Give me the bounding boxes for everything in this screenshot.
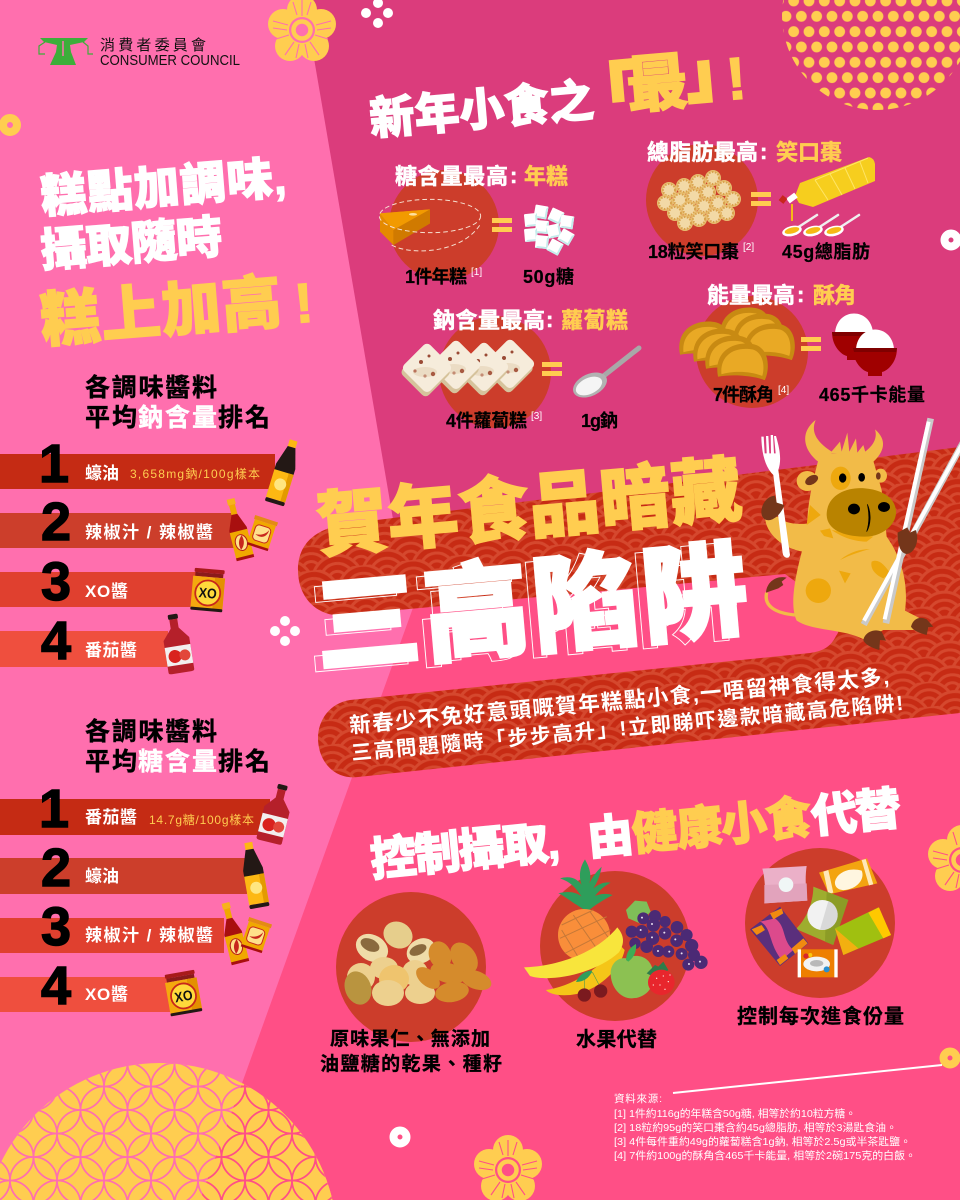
icon: equals sign <box>492 218 512 232</box>
panel: portion control: 控制每次進食份量 <box>737 1004 904 1028</box>
left title: 糕點加調味 攝取隨時 糕上加高: 攝取隨時 <box>39 211 224 277</box>
panel: highest sodium, turnip cake: 鈉含量最高 <box>433 308 545 333</box>
rank 4: XO sauce: 4 <box>41 956 71 1016</box>
rank 4: ketchup <box>0 611 195 675</box>
rank 4: ketchup: 4 <box>41 611 71 671</box>
muzzle <box>827 488 896 537</box>
sources footnote: [3] 4件每件重約49g的蘿蔔糕含1g鈉, 相等於2.5g或半茶匙鹽。 <box>614 1135 911 1148</box>
decoration: yellow lattice circle bottom left <box>0 1063 332 1200</box>
rank 3: XO sauce <box>0 552 226 612</box>
rank 2: oyster sauce: 蠔油 <box>85 866 119 886</box>
heading: 新年小食之「最」!: 最 <box>623 48 691 122</box>
panel: fruit: 水果代替 <box>576 1028 657 1051</box>
main title: 三高陷阱: 三高陷阱 <box>301 536 743 691</box>
horns and hair <box>805 420 883 463</box>
icon: cooking oil bottle with spoons <box>781 157 875 238</box>
icon: fruit <box>524 859 708 1002</box>
panel: highest energy, fried dumplings: 酥角 <box>813 283 856 308</box>
panel: highest sugar, nian gao <box>379 163 575 287</box>
heading: sugar ranking: 糖含量 <box>138 748 217 776</box>
logo: Consumer Council <box>39 37 240 69</box>
panel: highest energy, fried dumplings: 7件酥角 <box>713 385 774 405</box>
icon: equals sign <box>751 192 771 206</box>
icon: bowls of rice <box>832 314 897 376</box>
rank 1: oyster sauce: 3,658mg鈉/100g樣本 <box>130 466 260 481</box>
panel: fruit <box>524 859 708 1051</box>
bar chart: sodium ranking <box>0 434 303 675</box>
icon: nian gao slice with dashed outline <box>379 199 481 251</box>
panel: highest sodium, turnip cake: 蘿蔔糕 <box>561 308 628 333</box>
decoration: yellow dotted circle top right <box>782 0 960 110</box>
rank 2: chili sauce: 2 <box>41 492 71 552</box>
left title: 糕點加調味 攝取隨時 糕上加高: ! <box>292 271 316 335</box>
icon: equals sign <box>542 362 562 376</box>
main title: 三高陷阱: 三高陷阱 <box>310 532 752 687</box>
icon: smiling cookies <box>657 170 741 231</box>
heading: sodium ranking: 鈉含量 <box>138 404 217 432</box>
panel: highest sugar, nian gao: 糖含量最高 <box>395 164 508 189</box>
rank 2: oyster sauce: 2 <box>41 838 71 898</box>
heading: 新年小食之「最」!: 新年小食之 <box>367 75 596 145</box>
panel: portion control <box>737 848 904 1028</box>
rank 2: oyster sauce <box>0 838 270 909</box>
panel: highest sugar, nian gao: 50g糖 <box>523 267 574 287</box>
rank 1: oyster sauce <box>0 434 303 506</box>
panel: highest energy, fried dumplings: 465千卡能量 <box>819 385 925 405</box>
intro text on band: 三高問題隨時「步步高升」!立即睇吓邊款暗藏高危陷阱! <box>350 691 904 765</box>
panel: highest sodium, turnip cake: 4件蘿蔔糕 <box>446 411 527 431</box>
panel: highest fat, smiling cookies <box>646 139 875 262</box>
apple <box>611 944 653 998</box>
grapes <box>626 901 708 971</box>
left title: 糕點加調味 攝取隨時 糕上加高: 糕上加高 <box>38 269 284 355</box>
sources footnote: [4] 7件約100g的酥角含465千卡能量, 相等於2碗175克的白飯。 <box>614 1149 916 1162</box>
heading: sodium ranking <box>85 374 270 432</box>
panel: nuts and seeds <box>320 892 502 1075</box>
rank 1: ketchup: 1 <box>39 779 69 839</box>
cow mascot with fork and chopsticks <box>761 420 960 650</box>
heading: sugar ranking <box>85 718 270 776</box>
sources footnote: 資料來源: <box>614 1092 662 1105</box>
left title: 糕點加調味 攝取隨時 糕上加高 <box>38 151 316 355</box>
logo: Consumer Council: 消費者委員會 <box>100 37 206 54</box>
chopsticks <box>864 422 960 622</box>
icon: spoon of salt <box>569 348 639 403</box>
rank 4: XO sauce: XO醬 <box>85 984 128 1004</box>
heading: 控制攝取,由健康小食代替: 控制攝取, <box>368 816 562 886</box>
rank 1: ketchup <box>0 779 296 845</box>
spots <box>806 467 890 603</box>
pineapple <box>558 859 613 961</box>
heading: sugar ranking: 排名 <box>218 748 270 776</box>
panel: highest energy, fried dumplings: : <box>797 282 804 307</box>
heading: 控制攝取,由健康小食代替: 代替 <box>809 782 903 843</box>
heading: sodium ranking: 各調味醬料 <box>85 374 217 402</box>
icon: sugar cubes <box>524 204 575 256</box>
panel: highest sodium, turnip cake <box>399 307 639 431</box>
panel: highest energy, fried dumplings: 能量最高 <box>707 283 795 308</box>
rank 3: chili sauce <box>0 897 272 965</box>
panel: highest sodium, turnip cake: [3] <box>531 411 542 422</box>
icon: turnip cakes <box>399 338 536 398</box>
sources footnote: [1] 1件約116g的年糕含50g糖, 相等於約10粒方糖。 <box>614 1107 856 1120</box>
rank 1: ketchup: 番茄醬 <box>85 807 137 827</box>
panel: highest sodium, turnip cake: 1g鈉 <box>581 411 618 431</box>
panel: highest energy, fried dumplings <box>679 282 925 408</box>
strawberry <box>647 962 675 995</box>
rank 3: chili sauce: 3 <box>41 897 71 957</box>
panel: highest sugar, nian gao: 1件年糕 <box>405 266 467 287</box>
panel: highest sugar, nian gao: : <box>510 163 517 188</box>
panel: highest sodium, turnip cake: : <box>546 307 553 332</box>
panel: highest fat, smiling cookies: 總脂肪最高 <box>647 140 758 165</box>
heading: sugar ranking: 平均 <box>85 748 137 776</box>
heading: 新年小食之「最」!: 「 <box>571 58 639 132</box>
rank 3: XO sauce: 3 <box>41 552 71 612</box>
panel: highest fat, smiling cookies: 笑口棗 <box>776 140 842 165</box>
logo: Consumer Council: CONSUMER COUNCIL <box>100 53 240 69</box>
hooves and hands <box>761 496 933 650</box>
bar chart: sugar ranking <box>0 779 296 1016</box>
rank 1: ketchup: 14.7g糖/100g樣本 <box>149 812 254 827</box>
left arm <box>765 517 808 552</box>
heading: 新年小食之「最」!: 」 <box>683 37 751 111</box>
body <box>793 453 923 640</box>
ears <box>797 469 887 491</box>
banner: red wave band <box>298 447 960 777</box>
rank 4: ketchup: 番茄醬 <box>85 640 137 660</box>
heading: sodium ranking: 平均 <box>85 404 137 432</box>
icon: fried dumplings <box>679 308 795 380</box>
heading: sugar ranking: 各調味醬料 <box>85 718 217 746</box>
panel: highest fat, smiling cookies: : <box>760 139 767 164</box>
left title: 糕點加調味 攝取隨時 糕上加高: 糕點加調味, <box>39 151 288 223</box>
panel: highest sugar, nian gao: 年糕 <box>524 164 568 189</box>
heading: 新年小食之「最」! <box>367 37 751 145</box>
cherries <box>576 971 607 1002</box>
panel: nuts and seeds: 油鹽糖的乾果、種籽 <box>320 1052 502 1075</box>
panel: highest fat, smiling cookies: [2] <box>743 242 754 253</box>
icon: nuts <box>340 916 494 1008</box>
rank 2: chili sauce: 辣椒汁 / 辣椒醬 <box>85 522 213 542</box>
heading: 新年小食之「最」!: ! <box>723 44 749 113</box>
rank 3: chili sauce: 辣椒汁 / 辣椒醬 <box>85 925 213 945</box>
tail <box>766 577 795 615</box>
rank 3: XO sauce: XO醬 <box>85 581 128 601</box>
rank 4: XO sauce <box>0 956 202 1016</box>
heading: 控制攝取,由健康小食代替: 由 <box>585 808 636 865</box>
sources footnote <box>614 1065 942 1162</box>
heading: 控制攝取,由健康小食代替 <box>368 782 903 886</box>
panel: highest energy, fried dumplings: [4] <box>778 385 789 396</box>
icon: equals sign <box>801 337 821 351</box>
panel: highest sugar, nian gao: [1] <box>471 267 482 278</box>
rank 1: oyster sauce: 1 <box>39 434 69 494</box>
sources footnote: [2] 18粒約95g的笑口棗含約45g總脂肪, 相等於3湯匙食油。 <box>614 1121 897 1134</box>
heading: sodium ranking: 排名 <box>218 404 270 432</box>
face <box>839 473 890 532</box>
panel: nuts and seeds: 原味果仁、無添加 <box>330 1027 490 1050</box>
fork <box>761 435 790 558</box>
main title: 賀年食品暗藏: 賀年食品暗藏 <box>314 451 745 567</box>
rank 1: oyster sauce: 蠔油 <box>85 463 119 483</box>
bananas <box>524 927 625 995</box>
rank 2: chili sauce <box>0 492 278 561</box>
icon: snack packets <box>750 858 891 977</box>
intro text on band: 新春少不免好意頭嘅賀年糕點小食,一唔留神食得太多, <box>348 664 890 738</box>
heading: 控制攝取,由健康小食代替: 健康小食 <box>630 791 814 860</box>
panel: highest fat, smiling cookies: 18粒笑口棗 <box>648 241 739 262</box>
panel: highest fat, smiling cookies: 45g總脂肪 <box>782 241 870 262</box>
